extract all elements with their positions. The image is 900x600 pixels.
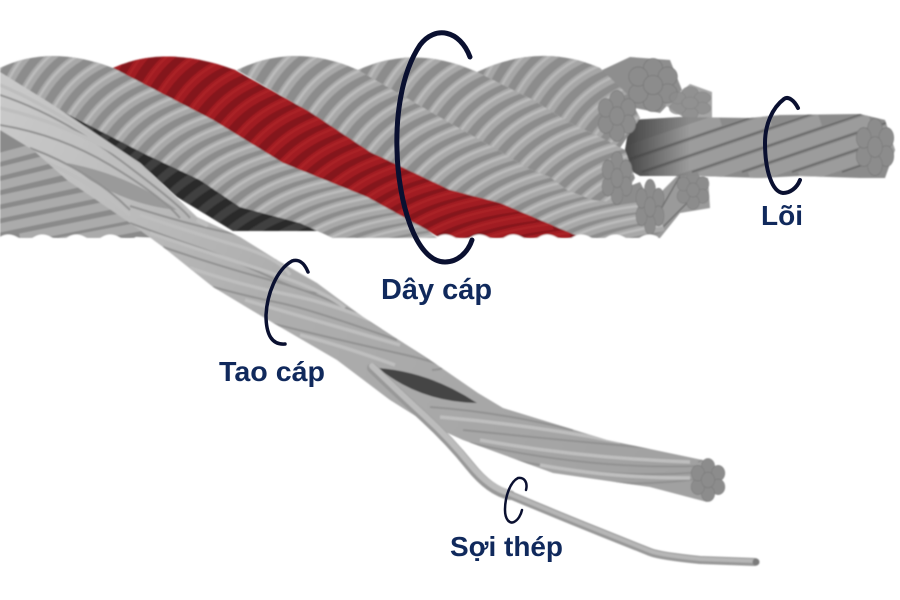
core strand end — [856, 118, 894, 176]
single wire (Sợi thép) — [372, 366, 760, 566]
back strands behind the core — [598, 57, 712, 238]
label: Sợi thép: Sợi thép — [450, 531, 563, 562]
label: Tao cáp: Tao cáp — [219, 356, 325, 387]
rope strand E — [477, 55, 641, 148]
lower-left rope strand — [0, 130, 150, 239]
bracket: Dây cáp — [397, 33, 472, 262]
unwound strand end — [691, 459, 725, 501]
dark inner strand — [64, 112, 318, 232]
bracket: Sợi thép — [505, 478, 527, 522]
label: Dây cáp: Dây cáp — [381, 274, 492, 306]
red highlighted strand — [112, 55, 576, 239]
unwound strand (Tao cáp) — [0, 60, 730, 510]
core strand (Lõi) — [624, 113, 896, 179]
bottom scalloped edge of the rope — [0, 234, 658, 240]
label: Lõi: Lõi — [761, 200, 803, 231]
gray front strand — [0, 55, 437, 239]
rope strand E end — [598, 90, 636, 142]
rope strand C — [236, 55, 664, 239]
rope strand D end — [602, 151, 632, 205]
rope strand C end — [636, 179, 664, 235]
bracket: Tao cáp — [266, 260, 308, 344]
rope strand D — [358, 56, 636, 202]
bracket: Lõi — [765, 98, 800, 193]
